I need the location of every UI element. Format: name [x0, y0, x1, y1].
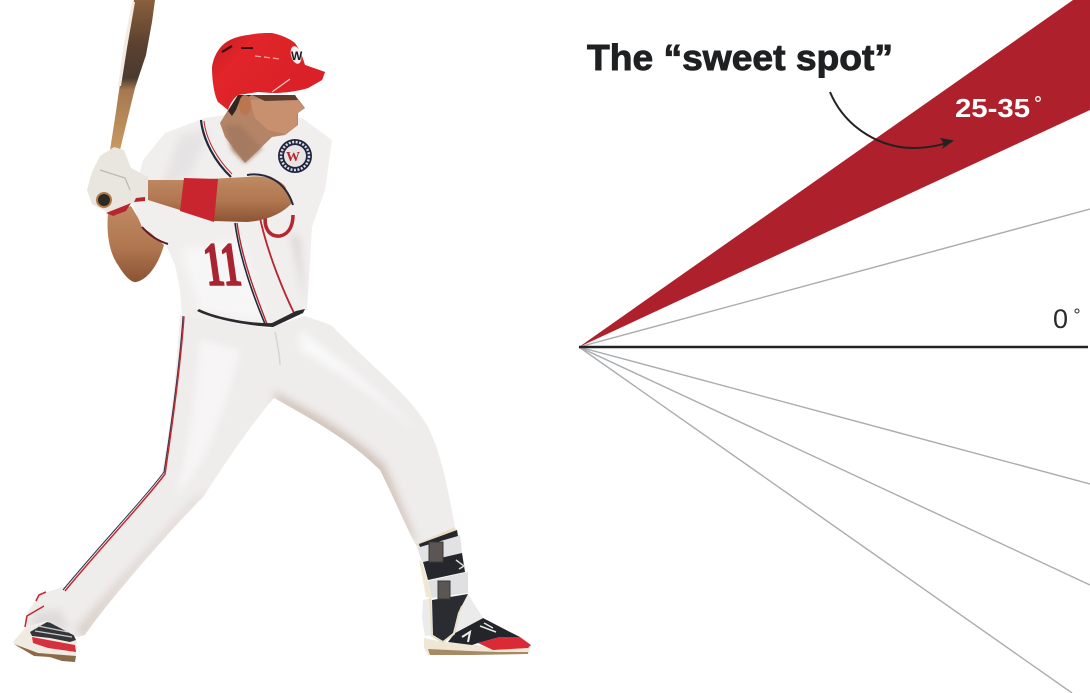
belt [197, 309, 305, 327]
wristband [180, 178, 218, 222]
ankle guard [416, 527, 483, 642]
jersey [132, 115, 332, 327]
arrow: heading to wedge [830, 92, 954, 149]
label: 0 degrees: 0 [1053, 304, 1068, 334]
heading: sweet spot: The “sweet spot” [587, 37, 893, 78]
jersey logo [265, 213, 293, 236]
back arm [107, 206, 164, 282]
label: 25-35 degrees: 25-35 [955, 93, 1030, 123]
illustration: batter [13, 0, 531, 662]
label: 0 degrees [1053, 304, 1079, 334]
sleeve patch: W [286, 150, 300, 165]
pants fly [275, 332, 280, 365]
ear [239, 95, 251, 115]
gray angle lines [579, 209, 1090, 693]
front arm [148, 174, 293, 222]
bat knob [97, 193, 111, 207]
batting gloves [87, 147, 148, 216]
sleeve patch [278, 139, 312, 173]
chart: launch angle fan [579, 0, 1090, 693]
neck and face [220, 95, 305, 163]
pants shading [30, 330, 420, 640]
sweet spot wedge [579, 0, 1090, 347]
back shoe [13, 622, 77, 662]
bat [110, 0, 155, 150]
jersey number: 11 [199, 230, 245, 299]
front shoe [424, 618, 531, 655]
pants piping [63, 316, 183, 590]
helmet logo [289, 45, 303, 65]
sleeve trim [142, 227, 168, 244]
helmet [212, 33, 325, 110]
jersey piping [201, 120, 295, 324]
helmet: W [291, 49, 303, 63]
pants [25, 315, 455, 640]
zero degree line [579, 346, 1088, 348]
jersey shading [160, 130, 305, 322]
